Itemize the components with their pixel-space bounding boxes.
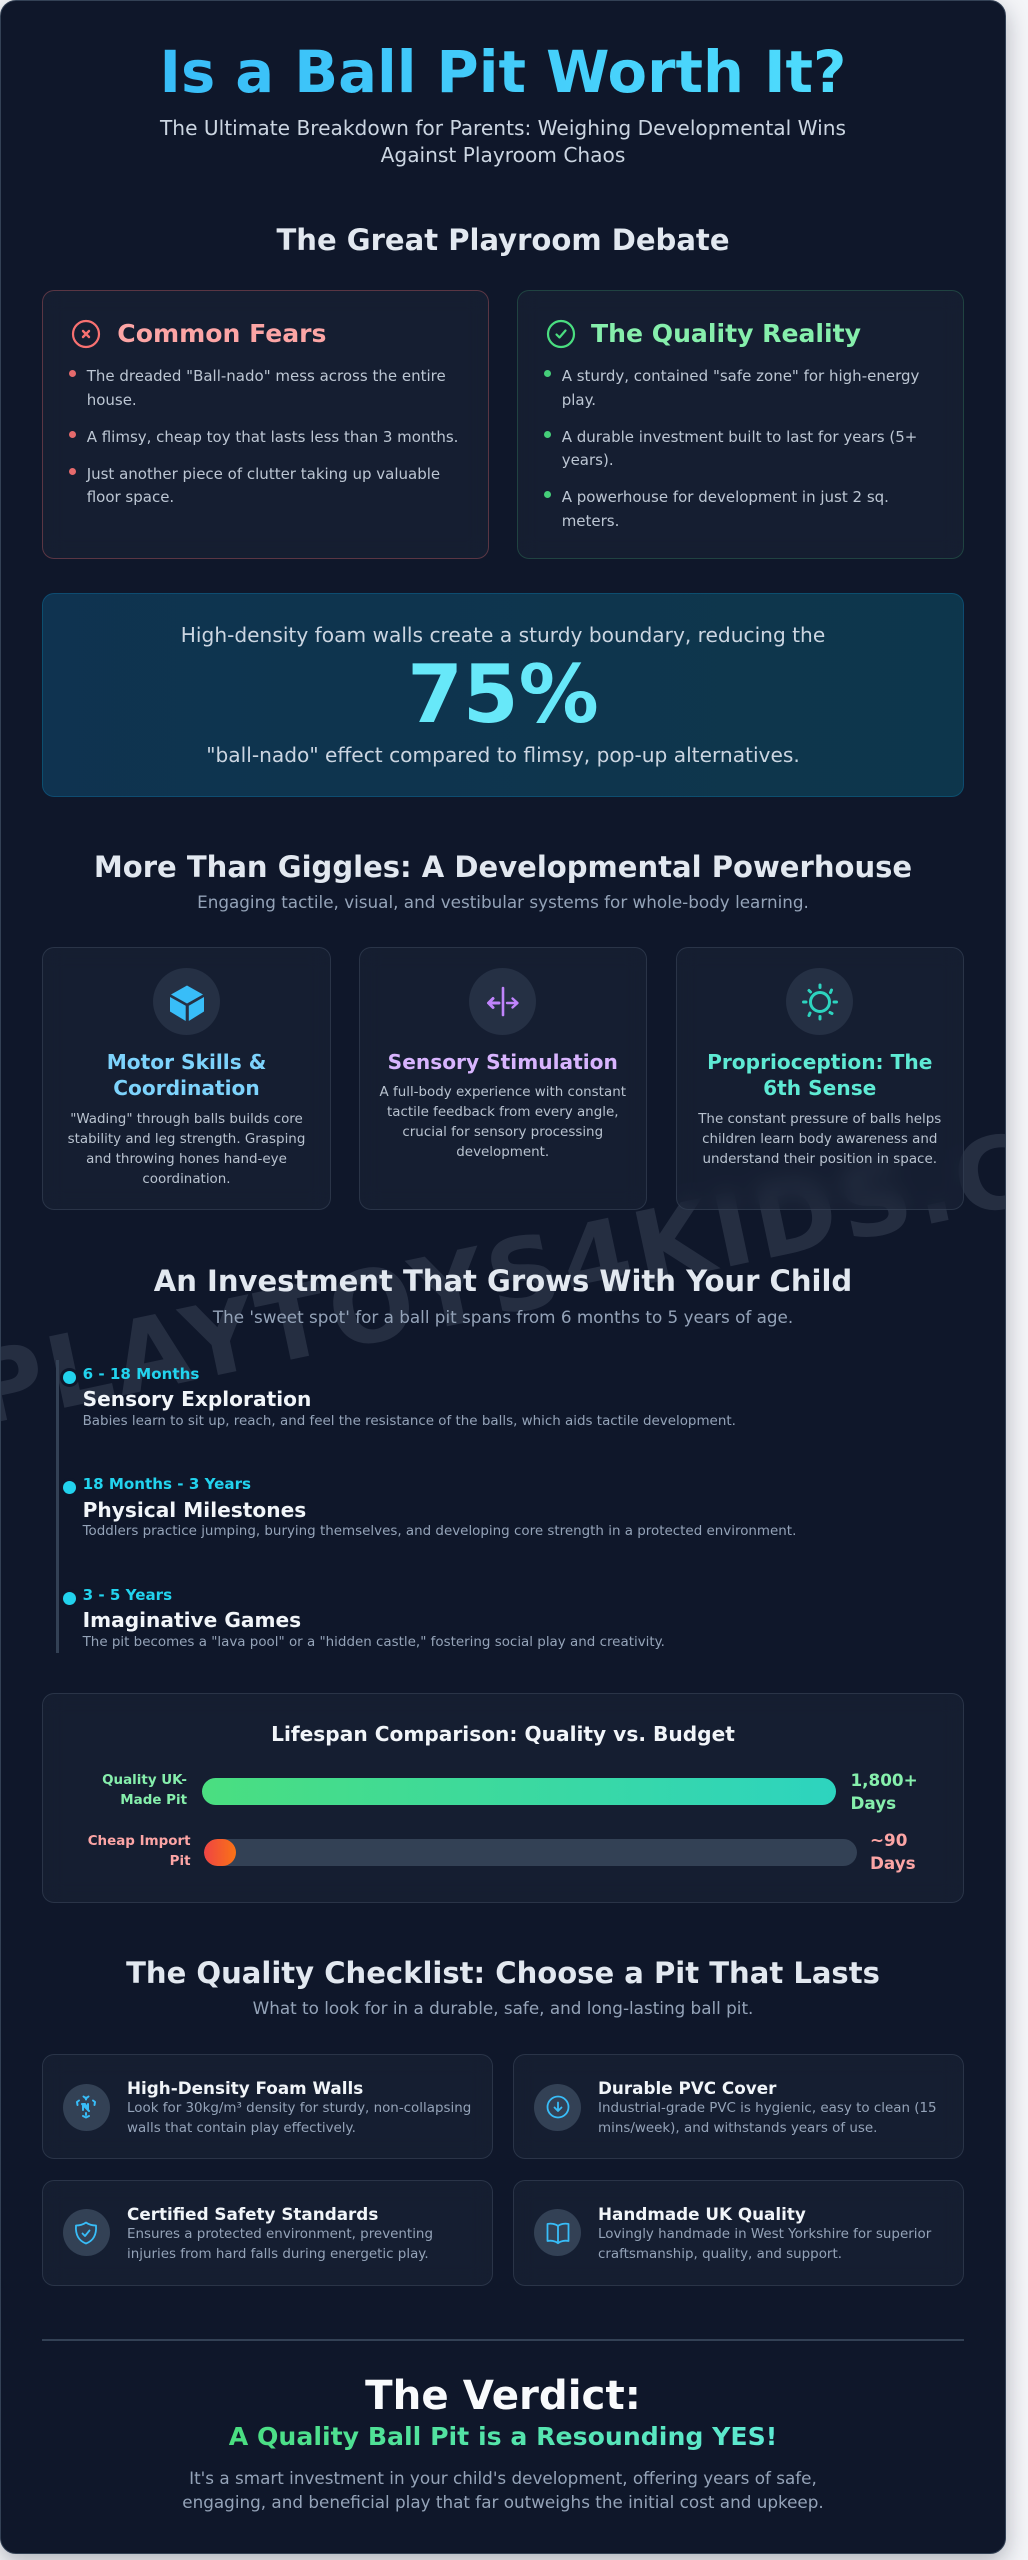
- verdict text: [182, 2468, 824, 2512]
- fear item 1: [69, 367, 446, 409]
- value: cheap pit: [870, 1830, 916, 1873]
- stat text before: High-density foam walls create a sturdy boundary, reducing the: [181, 623, 825, 647]
- card text: [68, 1112, 305, 1186]
- label: quality pit: Quality UK-: [102, 1773, 187, 1788]
- card title: [707, 1050, 932, 1100]
- panel: handmade quality: [513, 2180, 964, 2286]
- icon: check circle: [546, 320, 576, 348]
- item text: mins/week), and withstands years of use.: [598, 2121, 877, 2136]
- reality item 3: meters.: [562, 512, 619, 530]
- item title: High-Density Foam Walls: [127, 2078, 363, 2098]
- card text: understand their position in space.: [703, 1152, 937, 1166]
- value: cheap pit: ~90: [870, 1830, 907, 1850]
- stage 2: [63, 1475, 796, 1539]
- icon: sun: [786, 968, 853, 1035]
- item text: Industrial-grade PVC is hygienic, easy to clean (15: [598, 2101, 937, 2116]
- item text: [127, 2101, 471, 2136]
- panel: foam walls: [42, 2054, 493, 2159]
- item title: Handmade UK Quality: [598, 2204, 806, 2224]
- card text: children learn body awareness and: [702, 1132, 937, 1146]
- heading: the quality reality: The Quality Reality: [591, 319, 861, 348]
- value: quality pit: [850, 1770, 918, 1813]
- card text: stability and leg strength. Grasping: [68, 1132, 305, 1146]
- subtitle: The Ultimate Breakdown for Parents: Weighing Developmental Wins: [160, 116, 846, 140]
- item title: Certified Safety Standards: [127, 2204, 378, 2224]
- stage 3: The pit becomes a "lava pool" or a "hidden castle," fostering social play and creativity.: [83, 1635, 665, 1650]
- card text: coordination.: [142, 1172, 231, 1186]
- value: quality pit: 1,800+: [850, 1770, 918, 1790]
- section subtitle: Engaging tactile, visual, and vestibular systems for whole-body learning.: [197, 892, 809, 912]
- card text: crucial for sensory processing: [402, 1125, 603, 1140]
- stage 1: [60, 1364, 736, 1428]
- fear item 3: floor space.: [87, 488, 174, 506]
- value: cheap pit: Days: [870, 1853, 916, 1873]
- stat number: 75%: [407, 648, 599, 741]
- card title: Sensory Stimulation: [388, 1050, 618, 1074]
- timeline: [56, 1360, 796, 1653]
- stage 1: 6 - 18 Months: [83, 1364, 199, 1382]
- reality item 2: [544, 428, 917, 469]
- item text: Lovingly handmade in West Yorkshire for superior: [598, 2227, 931, 2242]
- label: quality pit: [102, 1773, 187, 1808]
- bar: cheap pit: [204, 1839, 857, 1866]
- icon: download circle: [534, 2084, 581, 2130]
- heading: quality checklist: The Quality Checklist: Choose a Pit That Lasts: [126, 1956, 880, 1990]
- fear item 3: Just another piece of clutter taking up valuable: [87, 465, 440, 483]
- reality item 2: A durable investment built to last for years (5+: [562, 428, 917, 446]
- label: cheap pit: Pit: [170, 1854, 190, 1869]
- item text: Ensures a protected environment, preventing: [127, 2227, 433, 2242]
- section subtitle: What to look for in a durable, safe, and long-lasting ball pit.: [253, 1998, 753, 2018]
- panel: pvc cover: [513, 2054, 964, 2159]
- item text: Look for 30kg/m³ density for sturdy, non-collapsing: [127, 2101, 471, 2116]
- label: cheap pit: [88, 1834, 190, 1869]
- reality item 1: [544, 367, 919, 409]
- heading: developmental powerhouse: More Than Giggles: A Developmental Powerhouse: [94, 850, 912, 884]
- panel: common fears: [42, 290, 489, 559]
- panel: quality reality: [517, 290, 964, 559]
- card title: 6th Sense: [763, 1076, 876, 1100]
- stage 2: Physical Milestones: [83, 1498, 306, 1522]
- label: quality pit: Made Pit: [120, 1793, 187, 1808]
- item text: walls that contain play effectively.: [127, 2121, 356, 2136]
- card text: tactile feedback from every angle,: [387, 1105, 618, 1120]
- card title: Coordination: [113, 1076, 260, 1100]
- stage 2: 18 Months - 3 Years: [83, 1475, 251, 1493]
- icon: foam: [63, 2084, 110, 2130]
- subtitle: [160, 116, 846, 167]
- section subtitle: The 'sweet spot' for a ball pit spans from 6 months to 5 years of age.: [213, 1307, 793, 1327]
- fear item 2: A flimsy, cheap toy that lasts less than 3 months.: [87, 428, 458, 446]
- item text: [598, 2227, 932, 2262]
- card title: [107, 1050, 266, 1100]
- icon: split arrows: [469, 968, 536, 1035]
- card title: Proprioception: The: [707, 1050, 932, 1074]
- reality item 1: play.: [562, 391, 596, 409]
- verdict answer: A Quality Ball Pit is a Resounding YES!: [229, 2422, 777, 2451]
- card text: A full-body experience with constant: [380, 1085, 626, 1100]
- reality item 3: [544, 488, 889, 530]
- fear item 1: house.: [87, 391, 137, 409]
- stage 3: 3 - 5 Years: [83, 1586, 172, 1604]
- item text: injuries from hard falls during energetic play.: [127, 2247, 429, 2262]
- icon: open book: [534, 2209, 581, 2256]
- label: cheap pit: Cheap Import: [88, 1834, 190, 1849]
- card text: and throwing hones hand-eye: [86, 1152, 287, 1166]
- card title: Motor Skills &: [107, 1050, 266, 1074]
- panel: proprioception: [676, 947, 964, 1210]
- heading: investment: An Investment That Grows With Your Child: [154, 1264, 852, 1298]
- card text: [380, 1085, 626, 1160]
- panel: lifespan comparison chart: [42, 1693, 964, 1903]
- reality item 3: A powerhouse for development in just 2 sq.: [562, 488, 889, 506]
- verdict text: engaging, and beneficial play that far outweighs the initial cost and upkeep.: [182, 2492, 824, 2512]
- value: quality pit: Days: [850, 1793, 896, 1813]
- stage 1: Babies learn to sit up, reach, and feel the resistance of the balls, which aids tactile development.: [83, 1414, 736, 1428]
- verdict heading: The Verdict:: [365, 2372, 641, 2418]
- heading: common fears: Common Fears: [117, 319, 326, 348]
- card text: "Wading" through balls builds core: [70, 1112, 303, 1126]
- stat callout: 75%: [42, 593, 964, 797]
- stage 1: Sensory Exploration: [83, 1387, 311, 1411]
- icon: shield check: [63, 2209, 110, 2256]
- fear item 3: [69, 465, 440, 506]
- reality item 1: A sturdy, contained "safe zone" for high-energy: [562, 367, 919, 385]
- chart title: Lifespan Comparison: Quality vs. Budget: [271, 1722, 735, 1746]
- icon: cube: [153, 968, 220, 1035]
- panel: sensory stimulation: [358, 947, 647, 1210]
- panel: safety standards: [42, 2180, 493, 2286]
- verdict text: It's a smart investment in your child's development, offering years of safe,: [189, 2468, 817, 2488]
- card text: [698, 1112, 941, 1166]
- heading: the great playroom debate: The Great Playroom Debate: [276, 222, 730, 256]
- subtitle: Against Playroom Chaos: [381, 143, 625, 167]
- icon: x circle: [72, 320, 100, 348]
- divider: [42, 2339, 964, 2341]
- card text: development.: [456, 1145, 549, 1160]
- bar: quality pit: [202, 1778, 836, 1805]
- stage 3: [63, 1586, 665, 1650]
- stage 3: Imaginative Games: [83, 1608, 301, 1632]
- fear item 1: The dreaded "Ball-nado" mess across the entire: [87, 367, 446, 385]
- title: Is a Ball Pit Worth It?: [160, 39, 846, 106]
- item text: craftsmanship, quality, and support.: [598, 2247, 842, 2262]
- timeline axis: [56, 1360, 58, 1653]
- bar fill: [204, 1839, 236, 1866]
- stage 2: Toddlers practice jumping, burying themselves, and developing core strength in a protected environment.: [83, 1524, 796, 1539]
- card text: The constant pressure of balls helps: [698, 1112, 941, 1126]
- item text: [127, 2227, 433, 2262]
- item text: [598, 2101, 937, 2136]
- reality item 2: years).: [562, 451, 614, 469]
- panel: motor skills: [42, 947, 331, 1210]
- stat text after: "ball-nado" effect compared to flimsy, pop-up alternatives.: [206, 743, 800, 767]
- item title: Durable PVC Cover: [598, 2078, 776, 2098]
